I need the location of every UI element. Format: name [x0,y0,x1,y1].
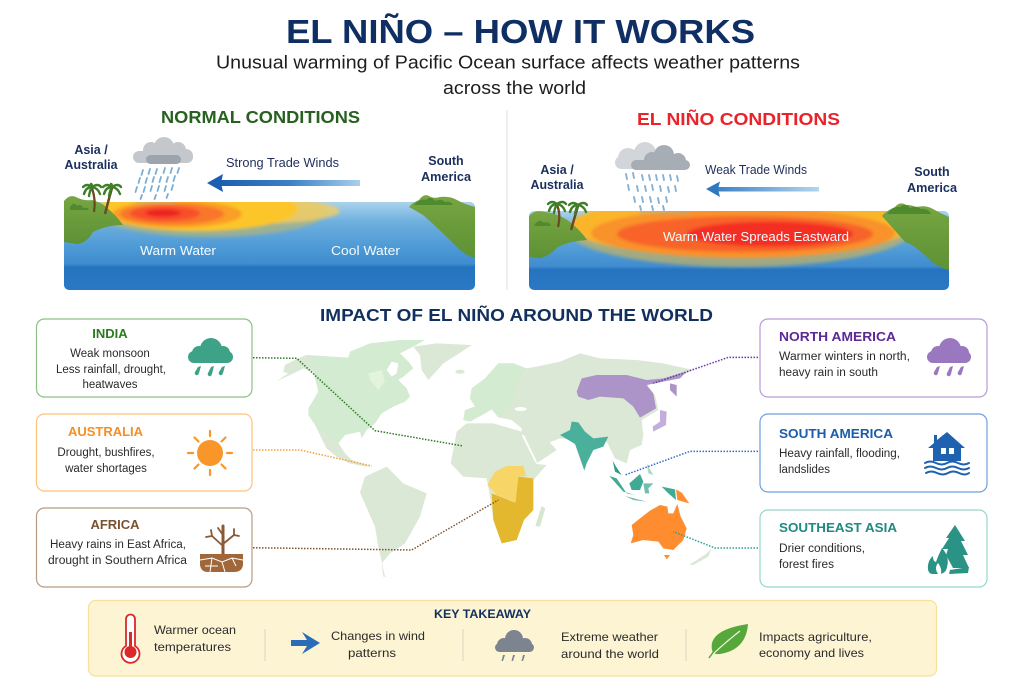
text: Australia effects [57,447,155,475]
text: India effects: Weak monsoon [70,348,150,360]
map: Australia [631,504,687,550]
icon: wind arrow [291,632,320,654]
label: South America: South [428,154,464,168]
heading: El Niño conditions: EL NIÑO CONDITIONS [637,108,840,129]
label: Asia / Australia [64,143,119,172]
icon: sun [188,431,232,475]
heading: impact around the world: IMPACT OF EL NIÑO AROUND THE WORLD [320,304,713,325]
text: Africa effects [48,539,188,567]
map: New Zealand [689,548,712,565]
land: Asia Australia, El Niño [529,211,587,258]
label: Asia / Australia: Australia [530,178,585,192]
icon: leaf [709,624,748,658]
text: Australia effects: Drought, bushfires, [57,447,155,459]
label: South America: America [421,170,472,184]
connector: Australia [250,450,372,466]
text: warmer ocean [154,623,236,654]
text: India effects [56,348,166,391]
text: extreme weather [561,630,659,661]
text: extreme weather: around the world [561,647,659,661]
panel: North America [760,319,987,397]
map: Greenland [413,343,472,380]
text: Africa effects: Heavy rains in East Africa, [50,539,186,551]
panel: Australia [36,414,252,491]
arrow: weak trade winds [706,182,819,197]
land: South America, El Niño [882,203,949,270]
map: Madagascar [535,506,545,527]
icon: dead tree and cracked soil [200,526,243,572]
label: strong trade winds: Strong Trade Winds [226,156,339,170]
connector: India [250,358,463,446]
label: weak trade winds: Weak Trade Winds [705,163,807,177]
label: South America [907,165,958,195]
text: South America effects [779,448,900,476]
map: Japan [653,410,667,432]
label: Asia / Australia: Asia / [74,143,108,157]
text: extreme weather: Extreme weather [561,630,658,644]
text: Africa effects: drought in Southern Africa [48,555,188,567]
heading: North America: NORTH AMERICA [779,329,897,344]
map: Great Lakes region [368,370,385,390]
label: cool water: Cool Water [331,243,401,258]
label: Asia / Australia [530,163,585,192]
world map [250,340,770,578]
panel: South America [760,414,987,492]
land: Asia Australia, normal [64,196,123,244]
text: Southeast Asia effects: forest fires [779,559,834,571]
text: North America effects [779,351,910,379]
map: Eurasia [463,353,693,463]
panel: normal conditions [64,107,475,290]
text: India effects: Less rainfall, drought, [56,364,166,376]
map: Tasmania [664,555,670,559]
panel: Southeast Asia [760,510,987,587]
map: Sumatra [609,476,635,495]
land: South America, normal [409,195,475,258]
text: Southeast Asia effects [779,543,865,571]
subtitle [216,52,800,98]
connector: Southeast Asia [673,532,770,548]
text: South America effects: Heavy rainfall, flooding, [779,448,900,460]
label: Asia / Australia: Asia / [540,163,574,177]
text: warmer ocean: temperatures [154,640,231,654]
heading: India: INDIA [92,326,128,341]
map: Alaska and Mexico shade [277,355,372,467]
map: Iceland [455,370,465,374]
icon: rain cloud, El Niño [615,142,690,210]
label: South America [421,154,472,184]
title: EL NIÑO – HOW IT WORKS [286,13,755,51]
map: Korea [670,383,677,397]
text: India effects: heatwaves [83,379,138,391]
map: Africa [451,423,547,543]
map: China and north Asia [577,372,687,418]
label: South America: South [914,165,950,179]
heading: Australia: AUSTRALIA [68,424,144,439]
text: Australia effects: water shortages [64,463,147,475]
heading: key takeaway: KEY TAKEAWAY [434,607,531,621]
map: Malay peninsula [613,461,622,475]
ocean: El Niño [529,211,949,290]
label: South America: America [907,181,958,195]
map: South America [360,467,427,578]
text: impacts: Impacts agriculture, [759,630,872,644]
panel: Africa [36,508,252,587]
map: Black Sea [515,407,527,411]
text: changes in wind: Changes in wind [331,629,425,643]
text: changes in wind: patterns [348,646,396,660]
connector: Africa [250,500,498,550]
heading: Africa: AFRICA [90,517,140,532]
connector: South America [625,451,770,475]
ocean: normal [64,202,475,290]
map: southern Africa drought [492,477,533,543]
panel: India [36,319,252,397]
map: Borneo [629,474,643,490]
subtitle: across the world [443,77,586,98]
map: Hudson Bay [387,362,398,377]
text: warmer ocean: Warmer ocean [154,623,236,637]
icon: storm cloud [495,630,534,661]
panel: key takeaway [88,600,936,676]
map: India [560,422,608,471]
icon: forest fire [928,525,969,574]
heading: South America: SOUTH AMERICA [779,426,894,441]
text: impacts [759,630,872,660]
map: Philippines [647,463,653,475]
icon: palm trees [83,184,121,214]
arrow: strong trade winds [207,174,360,192]
icon: flooded house [925,432,969,474]
panel: El Niño conditions [529,108,958,290]
connector: North America [653,357,770,383]
text: North America effects: heavy rain in south [779,367,878,379]
map: North America [277,340,425,467]
icon: palm trees [548,202,587,230]
text: South America effects: landslides [779,464,830,476]
label: warm water spreads eastward: Warm Water Spreads Eastward [663,229,849,244]
label: Asia / Australia: Australia [64,158,119,172]
heading: Southeast Asia: SOUTHEAST ASIA [779,520,898,535]
heading: normal conditions: NORMAL CONDITIONS [161,107,360,127]
icon: rain cloud [188,338,233,376]
icon: rain cloud [927,338,971,376]
subtitle: Unusual warming of Pacific Ocean surface affects weather patterns [216,52,800,72]
text: North America effects: Warmer winters in north, [779,351,910,363]
map: Papua orange [676,489,689,503]
icon: rain cloud, normal [133,137,193,199]
map: Java and islands [625,483,653,502]
text: Southeast Asia effects: Drier conditions, [779,543,865,555]
label: warm water: Warm Water [140,243,217,258]
map: Europe shade [463,363,527,422]
icon: thermometer [122,614,140,663]
map: New Guinea west [662,487,676,500]
map: east Africa rains [487,466,526,503]
map: Red Sea [522,435,537,463]
text: changes in wind [331,629,425,660]
text: impacts: economy and lives [759,646,864,660]
